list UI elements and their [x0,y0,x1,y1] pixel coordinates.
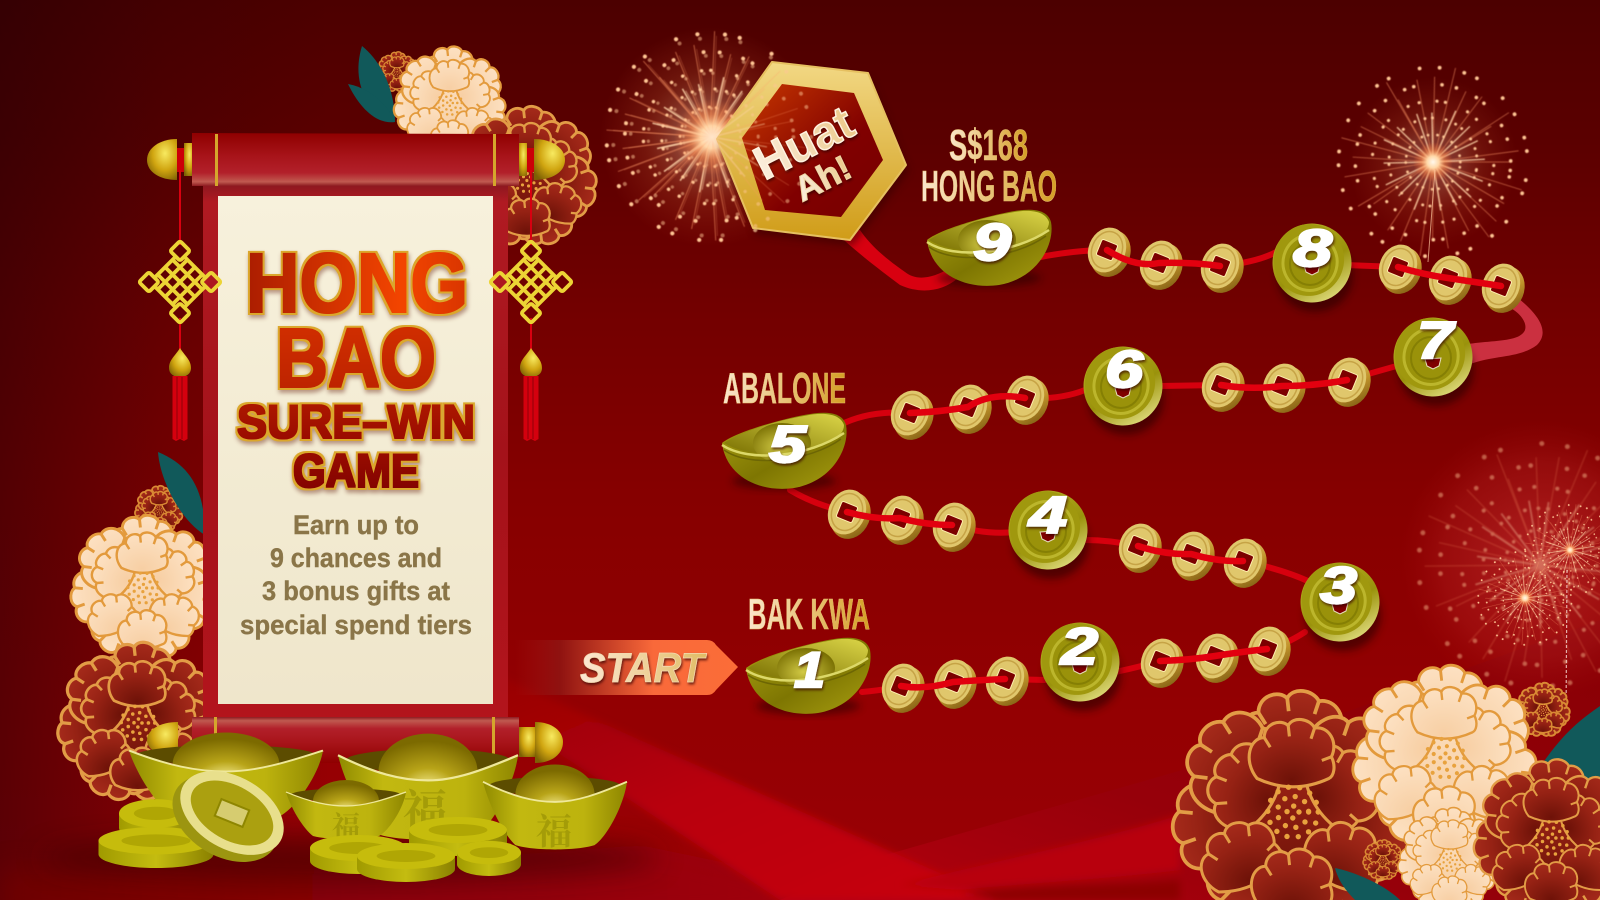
step 2 coin: 2 [1060,618,1098,676]
step 4 coin: 4 [1028,487,1067,545]
badge text: Huat [745,95,862,190]
start banner [515,640,738,695]
fireworks: upper right burst [1322,49,1544,273]
title: Hong Bao Sure-Win Game: GAME [293,444,419,497]
ribbon under coins [790,250,1400,692]
icon: tilted gold coin [157,752,298,881]
fireworks: upper left burst [600,27,820,247]
step 5 sycee [722,413,847,490]
flowers: bottom right [1164,665,1600,900]
subtitle text block: 9 chances and [270,543,442,573]
label: S$168 Hong Bao: S$168 [949,121,1028,170]
step 2 coin [1032,614,1128,711]
subtitle text block: Earn up to [293,510,419,540]
icon: top teal leaves [348,46,395,122]
badge text: Ah! [788,148,858,209]
gold ingots and coins pile: 福 [403,775,447,839]
title: Hong Bao Sure-Win Game: SURE–WIN [237,395,475,448]
scroll panel [203,186,508,721]
step 7 coin [1385,309,1481,406]
step 6 coin [1075,338,1171,435]
step 5 sycee: 5 [769,416,807,474]
subtitle text block: 3 bonus gifts at [262,576,450,606]
label: Bak Kwa: BAK KWA [748,590,870,639]
step 9 sycee [927,210,1052,287]
gold ingots and coins pile [40,732,660,882]
step 1 sycee: 1 [794,642,825,698]
start label: START [580,644,707,691]
finish hexagon badge [613,36,909,246]
ribbon: hexagon to 9 [835,230,958,290]
scroll top roller [147,133,565,186]
fireworks: lower right bursts [1384,407,1600,721]
hanging knot right [490,170,572,441]
coins between 8 and 7 [1372,239,1532,319]
step 8 coin [1264,215,1360,312]
hanging knot left [139,170,221,441]
flowers: top behind scroll [348,46,603,254]
coins between 9 and 8 [1081,222,1251,299]
step 9 sycee: 9 [973,214,1011,272]
icon: right teal leaves [1335,706,1600,900]
coins between 6 and 5 [884,370,1056,446]
gold ingots and coins pile: 福 [332,805,360,845]
step 1 sycee [746,638,871,715]
flowers: left behind scroll [52,452,225,811]
coins between 5 and 4 [821,484,983,558]
coins between 7 and 6 [1195,352,1378,419]
step 3 coin [1292,554,1388,651]
title: Hong Bao Sure-Win Game: BAO [276,311,436,405]
step 8 coin: 8 [1293,220,1332,278]
step 3 coin: 3 [1320,557,1357,615]
ribbon: 8 to 7 wide bend [1468,292,1543,364]
scroll paper [218,196,493,704]
label: S$168 Hong Bao: HONG BAO [921,162,1057,211]
step 4 coin [1000,482,1096,579]
subtitle text block [240,510,472,640]
subtitle text block: special spend tiers [240,610,472,640]
title: Hong Bao Sure-Win Game [237,236,475,497]
step 7 coin: 7 [1417,312,1456,370]
coins between 3 and 2 [1134,621,1298,694]
ribbon over coins [847,250,1501,687]
title: Hong Bao Sure-Win Game: HONG [246,236,468,330]
label: S$168 Hong Bao [921,121,1057,211]
scroll [147,133,565,763]
scroll bottom roller [147,717,563,763]
step 6 coin: 6 [1105,341,1144,399]
gold ingots and coins pile: 福 [536,804,572,855]
coins between 4 and 3 [1112,518,1274,594]
label: Abalone: ABALONE [723,364,846,413]
icon: left teal leaf [158,452,205,535]
coins between 2 and 1 [875,651,1036,719]
